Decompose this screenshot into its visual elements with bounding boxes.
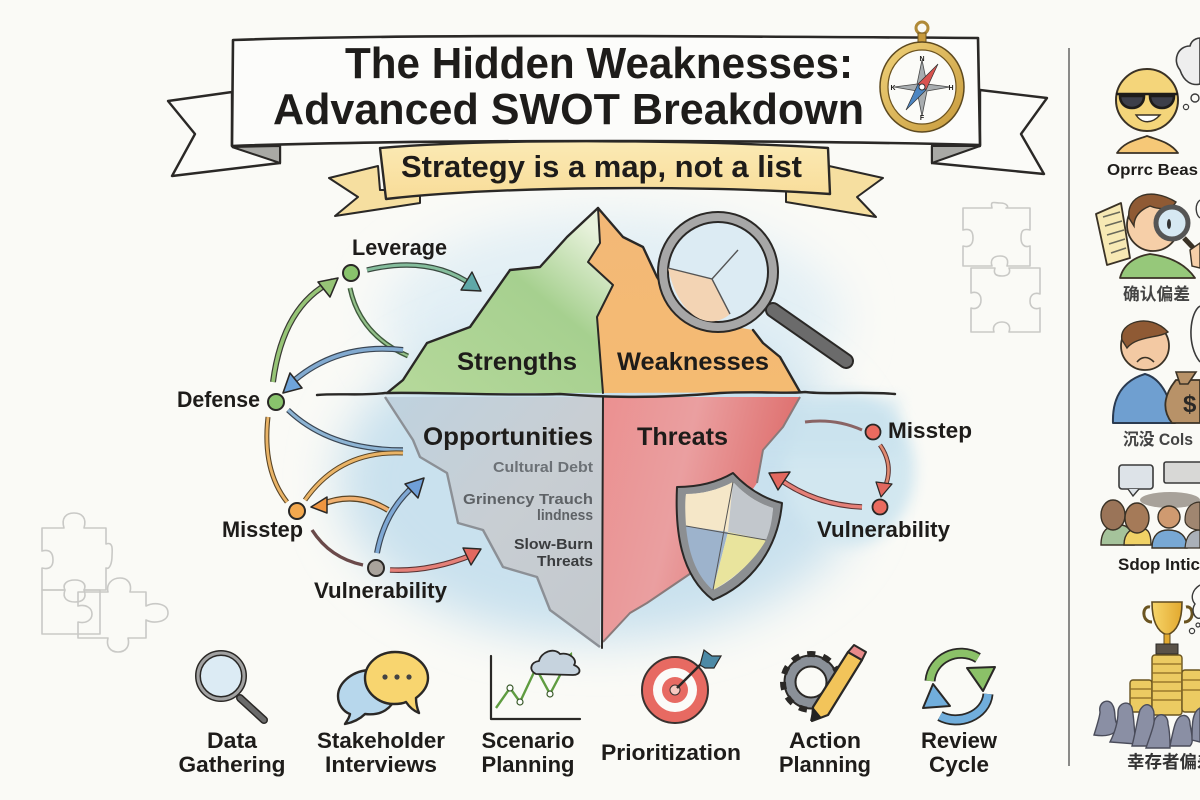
arrow: leverage to strengths xyxy=(367,265,481,291)
step: scenario planning xyxy=(482,651,580,777)
quadrant: opportunities: Threats xyxy=(537,553,593,570)
bias: sunk cost xyxy=(1113,306,1200,449)
step: action planning: Planning xyxy=(779,752,871,777)
arrow: defense to leverage xyxy=(273,278,338,382)
step: review cycle: Cycle xyxy=(929,752,989,777)
watercolor sea wash xyxy=(338,215,915,640)
arrow: vulnerability to opportunities xyxy=(377,478,424,553)
arc: misstep to iceberg xyxy=(305,453,403,500)
node: vulnerability: Vulnerability xyxy=(314,578,448,603)
step: review cycle xyxy=(921,653,998,777)
bias: confirmation xyxy=(1096,194,1200,304)
puzzle pieces: upper right xyxy=(963,202,1040,332)
title text: Advanced SWOT Breakdown xyxy=(273,85,864,134)
quadrant: opportunities: Opportunities xyxy=(423,423,593,451)
arc: misstep to vulnerability xyxy=(312,530,363,565)
step: action planning: Action xyxy=(789,728,861,753)
bias: sunk cost: 沉没 Cols xyxy=(1123,430,1193,449)
step: scenario planning: Scenario xyxy=(482,728,574,753)
step: prioritization xyxy=(601,650,741,765)
title text xyxy=(273,39,864,134)
step: data gathering: Data xyxy=(207,728,258,753)
vertical divider xyxy=(1068,48,1070,766)
quadrant: strengths xyxy=(387,208,613,393)
node: vulnerability: Vulnerability xyxy=(817,517,951,542)
icon: compass xyxy=(880,22,964,132)
quadrant: threats xyxy=(602,397,800,648)
icon: shield xyxy=(677,473,782,600)
node: misstep: Misstep xyxy=(888,418,972,443)
flow diagram: left loop xyxy=(177,235,481,603)
bias: optimism: Oprrc Beas xyxy=(1107,162,1198,179)
flow diagram: right loop xyxy=(769,418,972,542)
subtitle text: Strategy is a map, not a list xyxy=(401,149,802,184)
step: stakeholder interviews: Stakeholder xyxy=(317,728,445,753)
sidebar: cognitive biases xyxy=(1094,38,1200,772)
step: data gathering: Gathering xyxy=(178,752,286,777)
bias: confirmation: 确认偏差 xyxy=(1123,284,1190,304)
node: vulnerability xyxy=(817,500,951,542)
arrow: vulnerability to threats xyxy=(390,548,481,570)
node: leverage: Leverage xyxy=(352,235,447,260)
quadrant: threats: Threats xyxy=(637,423,728,451)
quadrant: opportunities xyxy=(385,397,603,647)
quadrant: opportunities: lindness xyxy=(537,507,593,524)
puzzle pieces: lower left xyxy=(42,513,168,652)
arrow: to misstep xyxy=(311,497,388,513)
step: scenario planning: Planning xyxy=(482,752,574,777)
node: leverage xyxy=(343,235,447,281)
arc: leverage to iceberg xyxy=(350,288,408,356)
ribbon left tail xyxy=(329,166,420,216)
step: data gathering xyxy=(178,653,286,777)
process row xyxy=(178,645,998,777)
quadrant: weaknesses xyxy=(588,208,800,393)
arrow: vulnerability to threats xyxy=(769,472,862,507)
step: review cycle: Review xyxy=(921,728,998,753)
icon: compass: N xyxy=(919,56,925,63)
node: misstep xyxy=(222,503,305,542)
step: stakeholder interviews xyxy=(317,652,445,777)
arc: defense to misstep xyxy=(267,417,287,502)
icon: magnifying glass over iceberg xyxy=(663,217,846,361)
banner right tail xyxy=(932,90,1047,174)
subtitle ribbon xyxy=(329,141,883,217)
bias: sunk cost: $ xyxy=(1183,391,1197,418)
quadrant: opportunities: Slow-Burn xyxy=(514,536,593,553)
icon: compass: H xyxy=(948,85,954,92)
arrow: misstep to vulnerability xyxy=(876,445,892,497)
arc: defense to opportunities xyxy=(288,410,403,450)
icon: compass: F xyxy=(920,115,925,122)
ribbon right tail xyxy=(786,166,883,217)
ribbon body xyxy=(380,141,830,199)
step: action planning xyxy=(779,645,871,777)
bias: groupthink xyxy=(1101,462,1200,574)
node: vulnerability xyxy=(314,560,448,603)
bias: survivorship xyxy=(1094,585,1200,772)
bias: optimism xyxy=(1107,38,1200,179)
node: misstep: Misstep xyxy=(222,517,303,542)
title text: The Hidden Weaknesses: xyxy=(345,39,853,88)
quadrant: opportunities: Cultural Debt xyxy=(493,459,593,476)
arc: threats to misstep xyxy=(805,421,862,430)
title banner xyxy=(168,36,1047,176)
icon: compass: K xyxy=(890,85,896,92)
node: defense: Defense xyxy=(177,387,260,412)
step: stakeholder interviews: Interviews xyxy=(325,752,437,777)
bias: groupthink: Sdop Intic xyxy=(1118,555,1200,574)
quadrant: opportunities: Grinency Trauch xyxy=(463,491,593,508)
banner left tail xyxy=(168,92,280,176)
banner body xyxy=(232,36,980,146)
iceberg quadrants xyxy=(317,208,895,648)
waterline xyxy=(317,392,895,397)
arrow: iceberg to defense xyxy=(283,349,403,393)
quadrant: weaknesses: Weaknesses xyxy=(617,348,769,376)
quadrant: strengths: Strengths xyxy=(457,348,577,376)
step: prioritization: Prioritization xyxy=(601,740,741,765)
